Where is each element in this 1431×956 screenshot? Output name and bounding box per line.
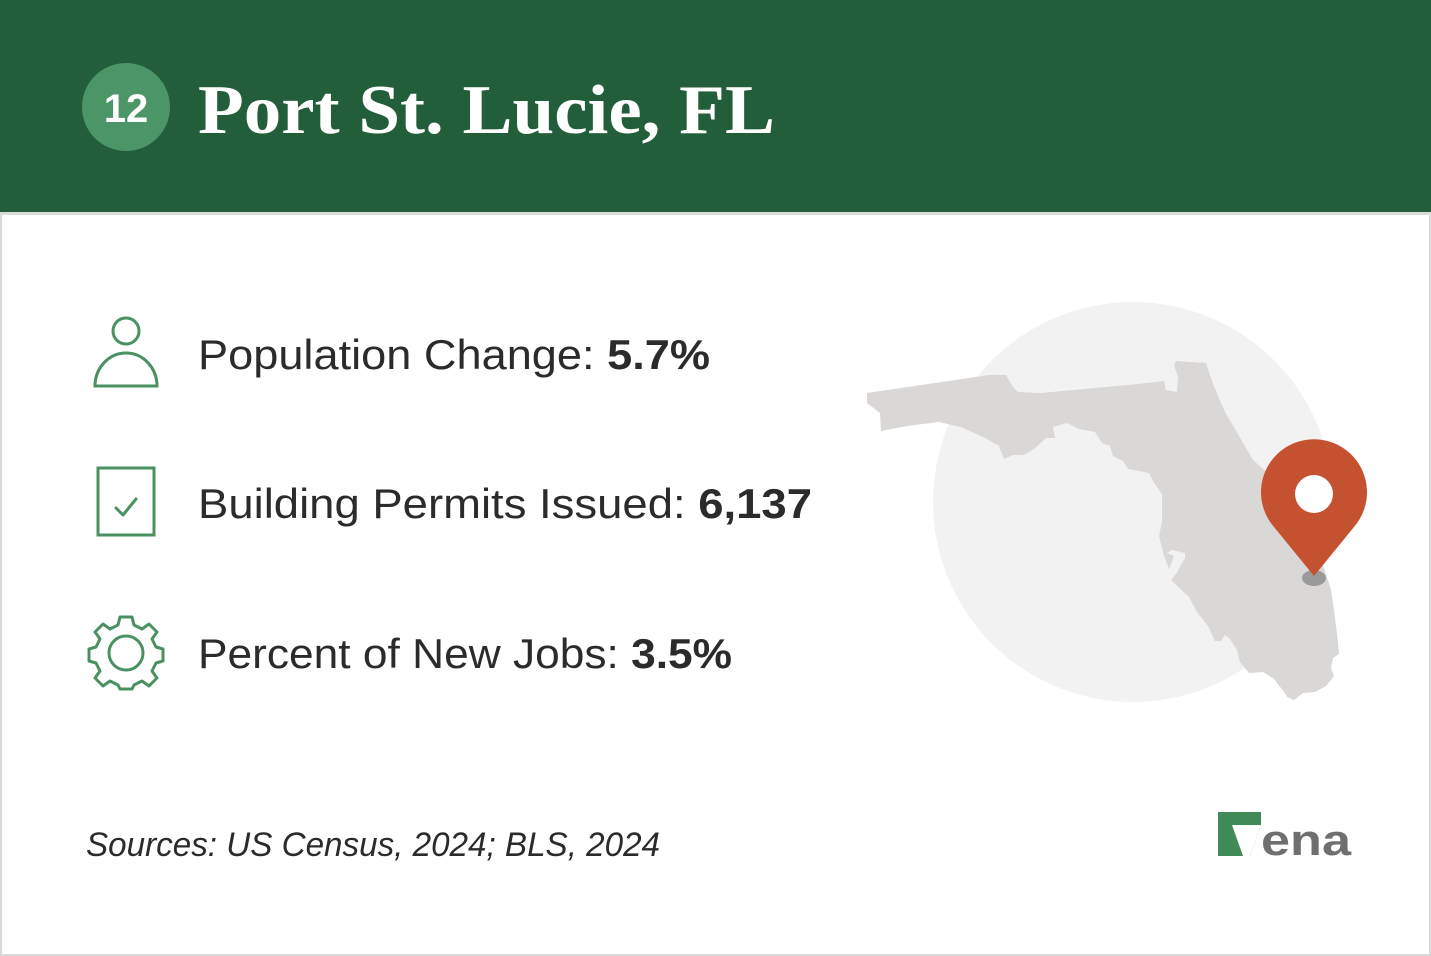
icon: checklist document: [98, 468, 154, 535]
icon: person: [95, 318, 157, 386]
icon: gear: [89, 617, 163, 689]
header band: [0, 0, 1431, 215]
icon: location pin: [1261, 439, 1367, 586]
sources note: Sources: US Census, 2024; BLS, 2024: [86, 826, 660, 864]
stat: new jobs: Percent of New Jobs: 3.5%: [198, 630, 732, 677]
logo: vena: [1218, 812, 1352, 865]
rank badge: [82, 63, 170, 151]
rank badge: 12: [104, 87, 148, 131]
map: Florida with location pin: [867, 302, 1367, 702]
stat: building permits: Building Permits Issued: 6,137: [198, 480, 812, 527]
title: Port St. Lucie, FL: [198, 72, 775, 149]
stat: population change: Population Change: 5.7%: [198, 331, 710, 378]
logo: vena: ena: [1261, 816, 1352, 865]
